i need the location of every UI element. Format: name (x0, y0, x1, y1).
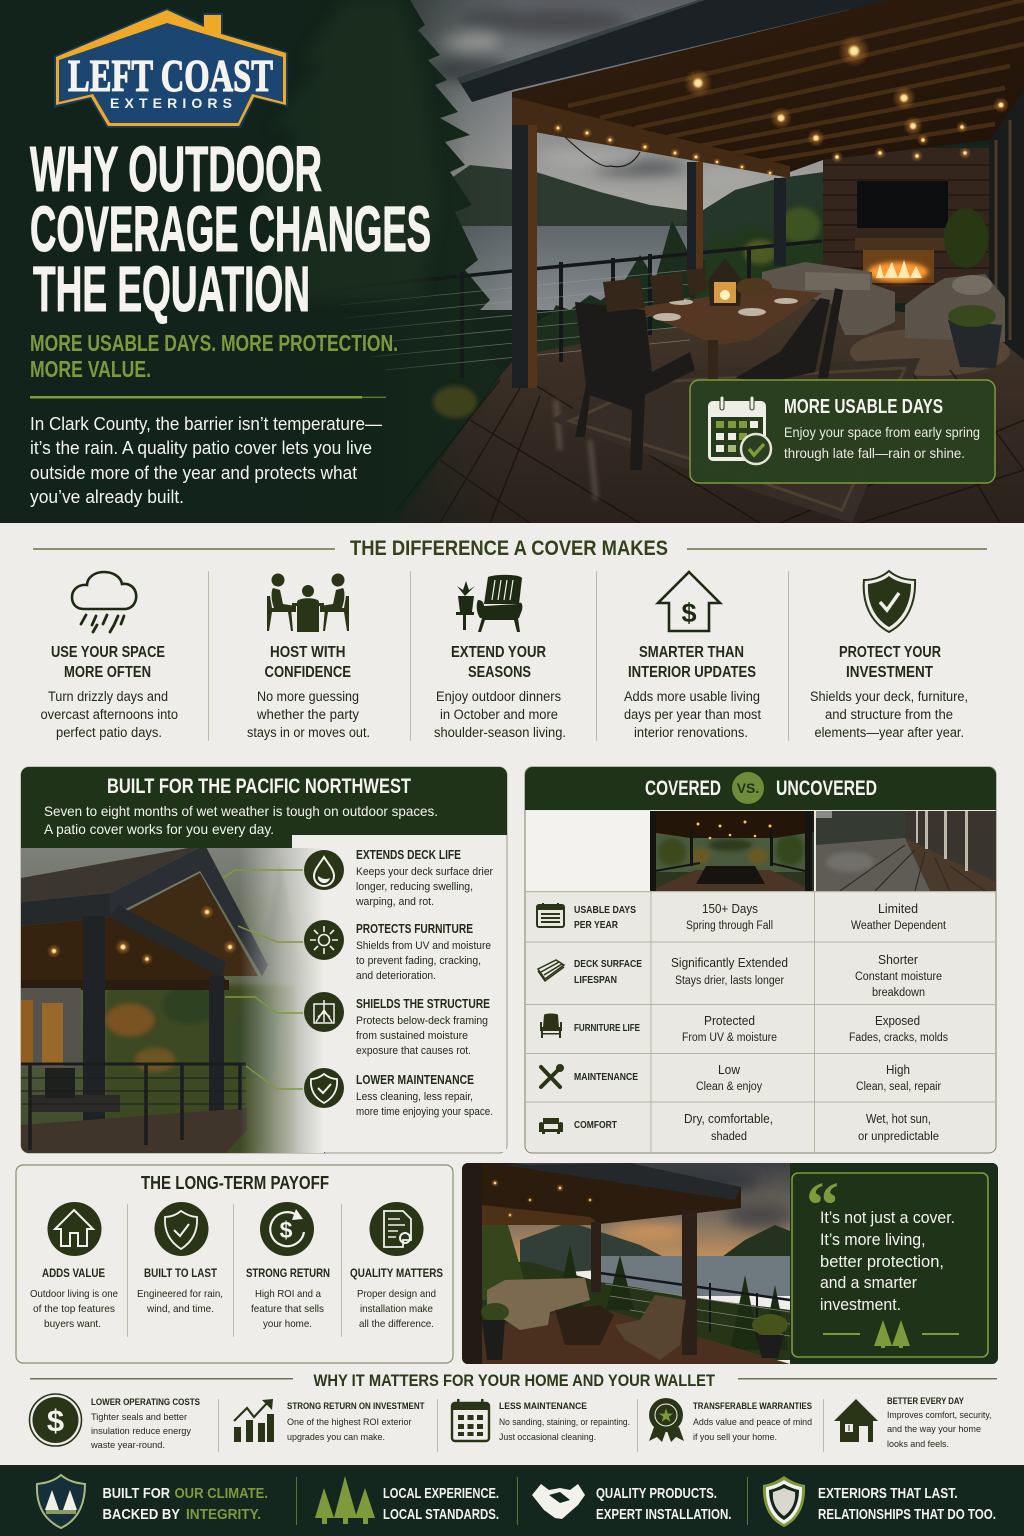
row: deck surface lifespan: Shorter (878, 952, 919, 967)
row: usable days: Weather Dependent (851, 920, 947, 932)
row: maintenance: Low (718, 1062, 741, 1077)
row: deck surface lifespan: Stays drier, lasts longer (675, 975, 784, 987)
feature: use your space more often: USE YOUR SPACE (51, 644, 165, 661)
row: usable days: PER YEAR (574, 919, 618, 931)
row: furniture life: FURNITURE LIFE (574, 1022, 640, 1034)
row: deck surface lifespan: Significantly Extended (671, 955, 788, 970)
table header (525, 767, 996, 810)
title: COVERAGE CHANGES (30, 193, 431, 265)
sofa left (762, 262, 895, 335)
icon: framed structure (304, 992, 344, 1032)
quote card: better protection, (820, 1252, 944, 1271)
benefit: shields the structure: exposure that causes rot. (356, 1045, 471, 1057)
benefit: lower maintenance: LOWER MAINTENANCE (356, 1073, 474, 1087)
icon: shield (763, 1476, 805, 1527)
feature: extend your seasons: shoulder-season living. (434, 725, 566, 740)
callout: more usable days: Enjoy your space from early spring (784, 424, 980, 440)
row: usable days: 150+ Days (702, 901, 758, 916)
benefit: transferable warranties: TRANSFERABLE WARRANTIES (693, 1401, 812, 1412)
feature: protect your investment: and structure from the (825, 707, 953, 722)
footer item: built for our climate: OUR CLIMATE. (174, 1485, 268, 1502)
ceiling lights (553, 35, 1009, 177)
item: adds value: of the top features (33, 1303, 115, 1315)
benefit: protects furniture: and deterioration. (356, 970, 436, 982)
footer item: built for our climate: INTEGRITY. (186, 1506, 261, 1523)
icon: people at a table (267, 574, 349, 632)
feature: smarter than interior updates: days per year than most (624, 707, 761, 722)
icon: three pines (315, 1476, 375, 1524)
feature: use your space more often: MORE OFTEN (64, 664, 151, 681)
photo: uncovered wet deck (816, 811, 996, 891)
quote card (792, 1169, 988, 1357)
icon: house with dollar: $ (681, 598, 697, 628)
title: THE EQUATION (33, 253, 310, 325)
recessed lights (47, 905, 237, 965)
feature: extend your seasons: EXTEND YOUR (451, 644, 546, 661)
photo: covered patio (650, 811, 814, 891)
icon: ribbon badge: ★ (659, 1408, 674, 1425)
icon: dollar coin (30, 1394, 82, 1446)
footer item: local experience (315, 1476, 499, 1524)
subheading: MORE VALUE. (30, 356, 151, 382)
icon: handshake (532, 1484, 585, 1519)
benefit: transferable warranties: Adds value and peace of mind (693, 1417, 812, 1428)
icon: sun (304, 920, 344, 960)
feature: host with confidence: stays in or moves out. (247, 725, 370, 740)
benefit: strong return on investment (234, 1399, 425, 1443)
callout: more usable days: through late fall—rain or shine. (784, 445, 965, 461)
subheading (30, 330, 398, 382)
row: usable days (537, 901, 947, 932)
icon: ribbon badge (649, 1398, 684, 1442)
footer item: quality products: EXPERT INSTALLATION. (596, 1506, 732, 1523)
item: built to last: Engineered for rain, (137, 1288, 223, 1300)
icon: sofa (539, 1118, 563, 1134)
foreground pine silhouette (380, 0, 490, 310)
deck (462, 1305, 790, 1364)
quote card: It’s more living, (820, 1230, 926, 1249)
benefit: shields the structure (304, 992, 490, 1057)
benefit: shields the structure: from sustained moisture (356, 1030, 468, 1042)
callout connector lines (223, 870, 303, 1089)
feature: host with confidence: CONFIDENCE (264, 664, 351, 681)
posts and beam (512, 97, 790, 178)
footer item: local experience: LOCAL EXPERIENCE. (383, 1485, 499, 1502)
item: adds value: Outdoor living is one (30, 1288, 118, 1300)
feature: host with confidence (247, 574, 370, 740)
feature: protect your investment (810, 571, 968, 740)
logo: Left Coast Exteriors: LEFT COAST (68, 51, 273, 101)
benefit: better every day: and the way your home (887, 1424, 981, 1435)
benefit: extends deck life: warping, and rot. (355, 896, 434, 908)
icon: shield (154, 1202, 208, 1256)
table header: VS. (737, 780, 759, 796)
feature: smarter than interior updates: SMARTER THAN (639, 644, 744, 661)
benefit: lower maintenance: Less cleaning, less repair, (356, 1091, 473, 1103)
benefit: extends deck life: Keeps your deck surface drier (356, 866, 493, 878)
intro paragraph: outside more of the year and protects what (30, 463, 357, 483)
panel: covered vs uncovered table (525, 767, 996, 1153)
feature: use your space more often: Turn drizzly days and (48, 689, 168, 704)
icon: calendar with check (708, 396, 771, 464)
footer item: exteriors that last (763, 1476, 996, 1527)
item: quality matters: installation make (360, 1303, 433, 1315)
logo: Left Coast Exteriors (54, 8, 288, 128)
ceiling (512, 0, 1024, 172)
row: maintenance: Clean & enjoy (696, 1081, 762, 1093)
icon: house (48, 1202, 102, 1256)
icon: house with dollar (658, 572, 720, 631)
rug (549, 358, 920, 523)
row: furniture life: Fades, cracks, molds (849, 1032, 948, 1044)
row: usable days: Spring through Fall (686, 920, 773, 932)
footer item: built for our climate (37, 1475, 268, 1528)
row: maintenance (541, 1062, 941, 1093)
railing (600, 1273, 790, 1340)
feature: extend your seasons: Enjoy outdoor dinners (436, 689, 561, 704)
wall and window (21, 988, 81, 1068)
item: strong return: STRONG RETURN (246, 1268, 330, 1280)
posts (83, 918, 105, 1120)
footer item: quality products (532, 1484, 732, 1523)
row: comfort (539, 1111, 939, 1143)
planters (948, 320, 1002, 368)
benefit: strong return on investment: upgrades you can make. (287, 1432, 385, 1443)
right wall with windows (1003, 327, 1024, 360)
benefit: less maintenance: No sanding, staining, or repainting. (499, 1417, 630, 1428)
quote card: and a smarter (820, 1273, 917, 1292)
benefit: better every day: BETTER EVERY DAY (887, 1396, 965, 1407)
item: quality matters: QUALITY MATTERS (350, 1268, 443, 1280)
benefit: less maintenance (452, 1399, 630, 1443)
benefit: protects furniture: Shields from UV and moisture (356, 940, 491, 952)
feature: protect your investment: elements—year after year. (814, 725, 964, 740)
benefit: shields the structure: Protects below-deck framing (356, 1015, 488, 1027)
item: strong return: feature that sells (251, 1303, 324, 1315)
item: adds value: ADDS VALUE (42, 1268, 105, 1280)
hero panel (0, 0, 1024, 523)
row: comfort: COMFORT (574, 1119, 617, 1131)
icon: shield check (304, 1068, 344, 1108)
stone wall and fireplace (823, 148, 989, 303)
item: built to last: BUILT TO LAST (144, 1268, 217, 1280)
benefit: lower operating costs (30, 1394, 200, 1451)
benefit: shields the structure: SHIELDS THE STRUCTURE (356, 997, 490, 1011)
row: comfort: Dry, comfortable, (684, 1111, 773, 1126)
row: furniture life: Protected (704, 1013, 755, 1028)
panel: quote over sunset patio photo (462, 1163, 998, 1364)
benefit: lower operating costs: waste year-round. (90, 1440, 165, 1451)
benefit: lower maintenance: more time enjoying your space. (356, 1106, 493, 1118)
row: usable days: Limited (878, 901, 918, 916)
quote card: investment. (820, 1295, 901, 1314)
deck floor (395, 300, 1024, 523)
benefit: better every day (834, 1396, 992, 1450)
icon: dollar coin: $ (47, 1403, 64, 1438)
feature: host with confidence: whether the party (256, 707, 359, 722)
row: deck surface lifespan (538, 952, 942, 999)
benefit: less maintenance: LESS MAINTENANCE (499, 1401, 587, 1412)
footer item: quality products: QUALITY PRODUCTS. (596, 1485, 717, 1502)
item: strong return (246, 1202, 330, 1330)
dining table (632, 288, 822, 345)
quote card: It’s not just a cover. (820, 1208, 955, 1227)
row: furniture life: Exposed (875, 1013, 920, 1028)
icon: water drop (304, 850, 344, 890)
item: built to last (137, 1202, 223, 1315)
row: comfort: or unpredictable (858, 1131, 939, 1143)
benefit: extends deck life: EXTENDS DECK LIFE (356, 848, 461, 862)
icon: deck boards (538, 960, 564, 981)
icon: crest with trees (37, 1475, 85, 1528)
section heading: the difference a cover makes: THE DIFFERENCE A COVER MAKES (350, 537, 668, 560)
railing (325, 241, 822, 378)
row: deck surface lifespan: breakdown (872, 987, 925, 999)
benefit: better every day: Improves comfort, security, (887, 1410, 992, 1421)
benefit: better every day: looks and feels. (887, 1439, 949, 1450)
row: maintenance: Clean, seal, repair (856, 1081, 941, 1093)
benefit: protects furniture: PROTECTS FURNITURE (356, 922, 473, 936)
item: adds value (30, 1202, 118, 1330)
item: strong return: High ROI and a (255, 1288, 321, 1300)
cover structure (482, 1163, 741, 1224)
benefit: lower operating costs: LOWER OPERATING COSTS (91, 1397, 200, 1408)
feature: protect your investment: Shields your deck, furniture, (810, 689, 968, 704)
callout: more usable days: MORE USABLE DAYS (784, 396, 943, 418)
logo: Left Coast Exteriors: EXTERIORS (110, 95, 232, 111)
quotation mark: “ (806, 1169, 839, 1242)
lantern centerpiece (708, 258, 772, 306)
title (30, 133, 431, 325)
section heading: why it matters: WHY IT MATTERS FOR YOUR HOME AND YOUR WALLET (314, 1372, 715, 1390)
footer item: local experience: LOCAL STANDARDS. (383, 1506, 499, 1523)
feature: host with confidence: HOST WITH (270, 644, 346, 661)
benefit: lower operating costs: insulation reduce energy (91, 1426, 191, 1437)
item: adds value: buyers want. (44, 1318, 101, 1330)
panel: built for the pacific northwest: Seven to eight months of wet weather is tough on outdoor spaces. (44, 803, 438, 819)
icon: rain cloud (72, 572, 136, 632)
row: deck surface lifespan: Constant moisture (855, 971, 942, 983)
feature: extend your seasons: in October and more (440, 707, 558, 722)
row: maintenance: MAINTENANCE (574, 1071, 638, 1083)
footer band (0, 1465, 1024, 1536)
item: quality matters: all the difference. (359, 1318, 434, 1330)
icon: calendar (452, 1399, 489, 1441)
subheading: MORE USABLE DAYS. MORE PROTECTION. (30, 330, 398, 356)
icon: armchair (540, 1014, 562, 1038)
panel header (21, 767, 507, 848)
row: deck surface lifespan: LIFESPAN (574, 974, 617, 986)
feature: use your space more often (40, 572, 178, 740)
item: strong return: your home. (263, 1318, 312, 1330)
roof and gable (21, 845, 205, 902)
callout: more usable days (690, 380, 995, 483)
deck and railing (21, 1108, 247, 1153)
panel: built for the pacific northwest (21, 767, 507, 1155)
benefit: protects furniture (304, 920, 491, 982)
item: quality matters: Proper design and (357, 1288, 436, 1300)
icon: shield with check (864, 571, 915, 632)
item: quality matters (350, 1202, 443, 1330)
icon: dollar with return arrow: $ (280, 1217, 293, 1243)
benefit: transferable warranties (649, 1398, 812, 1443)
benefit: protects furniture: to prevent fading, cracking, (356, 955, 481, 967)
row: comfort: Wet, hot sun, (866, 1111, 931, 1126)
icon: wrench and screwdriver (541, 1065, 563, 1087)
feature: smarter than interior updates (624, 572, 761, 740)
feature: protect your investment: PROTECT YOUR (839, 644, 941, 661)
hero photo: covered patio at the lake (340, 0, 1024, 523)
photo: sunset patio (462, 1163, 998, 1364)
panel: the long-term payoff: THE LONG-TERM PAYOFF (141, 1173, 329, 1193)
intro paragraph: it’s the rain. A quality patio cover lets you live (30, 438, 372, 458)
armchair right (905, 274, 1005, 342)
feature: host with confidence: No more guessing (257, 689, 359, 704)
dark forest fade over left side (340, 0, 500, 523)
benefit: strong return on investment: STRONG RETURN ON INVESTMENT (287, 1401, 425, 1412)
photo: gabled patio cover in the forest (21, 845, 325, 1155)
row: usable days: USABLE DAYS (574, 904, 636, 916)
benefit: transferable warranties: if you sell your home. (693, 1432, 777, 1443)
dining chairs (575, 288, 843, 470)
icon: document with seal (370, 1202, 424, 1256)
row: furniture life (540, 1013, 948, 1044)
row: maintenance: High (886, 1062, 910, 1077)
icon: twin pines with rules (823, 1320, 959, 1348)
icon: rising bar chart (234, 1399, 274, 1442)
item: built to last: wind, and time. (146, 1303, 214, 1315)
benefit: extends deck life (304, 848, 493, 908)
footer item: built for our climate: BACKED BY (102, 1506, 180, 1523)
footer item: built for our climate: BUILT FOR (102, 1485, 170, 1502)
table header: UNCOVERED (776, 777, 877, 800)
row: furniture life: From UV & moisture (682, 1032, 777, 1044)
feature: smarter than interior updates: INTERIOR UPDATES (628, 664, 756, 681)
intro paragraph (30, 414, 382, 507)
footer item: exteriors that last: EXTERIORS THAT LAST. (818, 1485, 958, 1502)
row: deck surface lifespan: DECK SURFACE (574, 958, 642, 970)
panel: built for the pacific northwest: BUILT FOR THE PACIFIC NORTHWEST (107, 775, 411, 798)
panel: built for the pacific northwest: A patio cover works for you every day. (44, 821, 274, 837)
table grid lines (525, 891, 996, 1153)
intro paragraph: you’ve already built. (30, 487, 184, 507)
benefit: lower maintenance (304, 1068, 493, 1118)
intro paragraph: In Clark County, the barrier isn’t temperature— (30, 414, 382, 434)
icon: calendar (537, 903, 564, 927)
feature: use your space more often: perfect patio days. (56, 725, 162, 740)
feature: smarter than interior updates: interior renovations. (634, 725, 748, 740)
feature: use your space more often: overcast afternoons into (40, 707, 178, 722)
panel: the long-term payoff (16, 1165, 453, 1363)
feature: extend your seasons (434, 575, 566, 740)
feature: smarter than interior updates: Adds more usable living (624, 689, 760, 704)
feature: protect your investment: INVESTMENT (846, 664, 933, 681)
outdoor sofa and chair (487, 1278, 590, 1330)
feature: extend your seasons: SEASONS (468, 664, 531, 681)
benefit: strong return on investment: One of the highest ROI exterior (287, 1417, 412, 1428)
title: WHY OUTDOOR (30, 133, 322, 205)
benefit: lower operating costs: Tighter seals and better (91, 1412, 187, 1423)
icon: house (834, 1399, 878, 1442)
row: comfort: shaded (711, 1131, 747, 1143)
icon: patio chair with plant (456, 575, 522, 632)
table header: COVERED (645, 777, 721, 800)
benefit: extends deck life: longer, reducing swelling, (356, 881, 473, 893)
roof edge (457, 0, 889, 102)
benefit: less maintenance: Just occasional cleaning. (499, 1432, 596, 1443)
